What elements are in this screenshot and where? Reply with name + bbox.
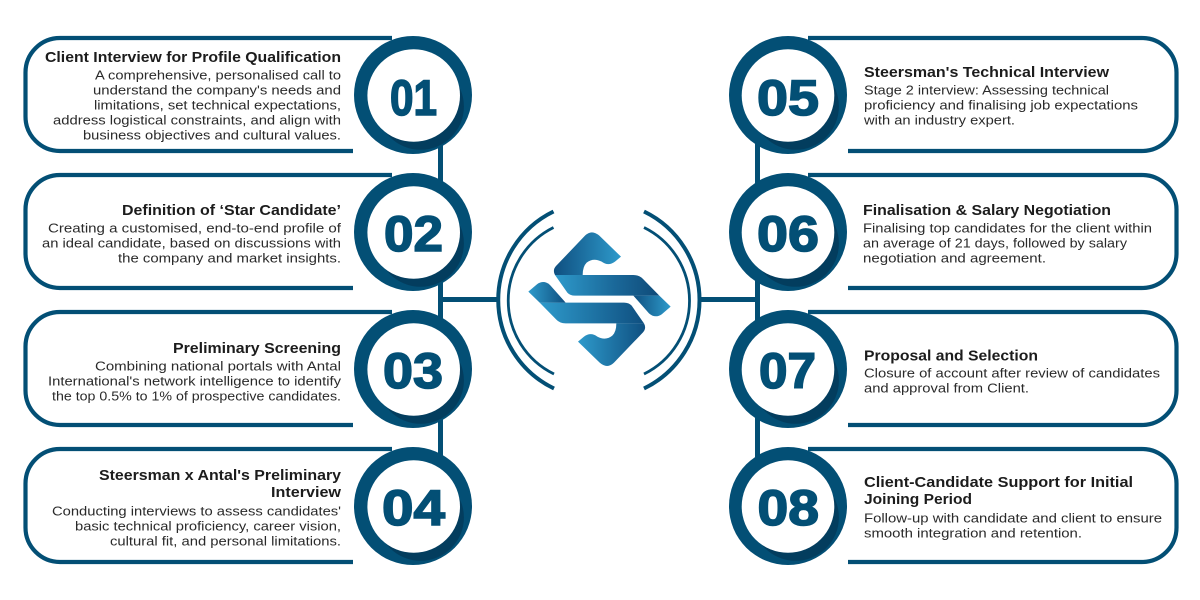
badge 04 xyxy=(354,447,472,565)
panel: step 01 xyxy=(26,36,472,154)
title 07: Proposal and Selection xyxy=(864,348,1038,364)
body 06: an average of 21 days, followed by salary xyxy=(863,236,1127,250)
body 04: basic technical proficiency, career vision, xyxy=(75,518,341,534)
connector: right link to logo xyxy=(701,297,757,302)
body 06: negotiation and agreement. xyxy=(863,250,1046,266)
badge 04: 04 xyxy=(382,479,445,536)
card outline 08 xyxy=(808,449,1176,562)
panel: step 05 xyxy=(729,36,1176,154)
card outline 07 xyxy=(808,312,1176,425)
connector: left timeline xyxy=(438,95,443,506)
panel: step 03 xyxy=(26,310,472,428)
badge 08: 08 xyxy=(758,479,819,536)
icon: S logo xyxy=(528,232,671,366)
title 08: Joining Period xyxy=(864,491,972,508)
central logo arcs xyxy=(498,212,700,388)
body 07: and approval from Client. xyxy=(864,380,1029,396)
body 03: Combining national portals with Antal xyxy=(95,358,341,374)
body 01 xyxy=(53,68,341,142)
badge 05 xyxy=(729,36,847,154)
title 06: Finalisation & Salary Negotiation xyxy=(863,202,1111,219)
body 06: Finalising top candidates for the client within xyxy=(863,220,1152,236)
body 05: proficiency and finalising job expectations xyxy=(864,98,1138,112)
badge 05: 05 xyxy=(757,69,819,126)
body 03: International's network intelligence to identify xyxy=(48,374,341,388)
body 04: cultural fit, and personal limitations. xyxy=(110,534,341,548)
body 05 xyxy=(863,82,1138,128)
title 04: Interview xyxy=(271,484,341,501)
badge 07 xyxy=(729,310,847,428)
panel: step 06 xyxy=(729,173,1176,291)
badge 08 xyxy=(729,447,847,565)
card outline 05 xyxy=(808,38,1176,151)
title 02: Definition of ‘Star Candidate’ xyxy=(122,202,341,219)
body 03 xyxy=(48,358,341,404)
card outline 06 xyxy=(808,175,1176,288)
body 04: Conducting interviews to assess candidates' xyxy=(52,504,341,518)
body 07 xyxy=(864,366,1160,396)
connector: left link to logo xyxy=(440,297,497,302)
body 02: an ideal candidate, based on discussions with xyxy=(42,236,341,250)
badge 02 xyxy=(354,173,472,291)
panel: step 08 xyxy=(729,447,1176,565)
body 08: Follow-up with candidate and client to ensure xyxy=(864,510,1162,526)
body 04 xyxy=(52,504,341,548)
card outline 02 xyxy=(26,175,392,288)
body 02 xyxy=(42,220,341,266)
title 04 xyxy=(99,467,342,501)
body 08 xyxy=(864,510,1162,540)
body 07: Closure of account after review of candidates xyxy=(864,366,1160,380)
title 04: Steersman x Antal's Preliminary xyxy=(99,467,342,484)
badge 06: 06 xyxy=(757,205,819,262)
connector: right timeline xyxy=(755,95,760,506)
body 05: with an industry expert. xyxy=(863,112,1015,128)
badge 02: 02 xyxy=(384,205,443,262)
badge 01: 01 xyxy=(390,69,437,126)
title 01: Client Interview for Profile Qualification xyxy=(45,49,341,66)
card outline 03 xyxy=(26,312,392,425)
badge 07: 07 xyxy=(759,342,816,399)
body 01: understand the company's needs and xyxy=(93,82,341,98)
panel: step 07 xyxy=(729,310,1176,428)
card outline 01 xyxy=(26,38,392,151)
panel: step 02 xyxy=(26,173,472,291)
body 02: Creating a customised, end-to-end profile of xyxy=(48,220,341,236)
panel: step 04 xyxy=(26,447,472,565)
title 08 xyxy=(864,474,1133,508)
badge 06 xyxy=(729,173,847,291)
body 08: smooth integration and retention. xyxy=(864,526,1082,540)
badge 01 xyxy=(354,36,472,154)
body 01: limitations, set technical expectations, xyxy=(94,98,341,112)
body 06 xyxy=(863,220,1152,266)
body 05: Stage 2 interview: Assessing technical xyxy=(864,82,1109,98)
title 03: Preliminary Screening xyxy=(173,340,341,357)
badge 03: 03 xyxy=(383,342,443,399)
body 03: the top 0.5% to 1% of prospective candidates. xyxy=(52,388,341,404)
body 01: A comprehensive, personalised call to xyxy=(95,68,341,82)
title 05: Steersman's Technical Interview xyxy=(864,64,1109,81)
badge 03 xyxy=(354,310,472,428)
body 01: business objectives and cultural values. xyxy=(83,128,341,142)
card outline 04 xyxy=(26,449,392,562)
title 08: Client-Candidate Support for Initial xyxy=(864,474,1133,491)
body 01: address logistical constraints, and align with xyxy=(53,112,341,128)
body 02: the company and market insights. xyxy=(118,250,341,266)
